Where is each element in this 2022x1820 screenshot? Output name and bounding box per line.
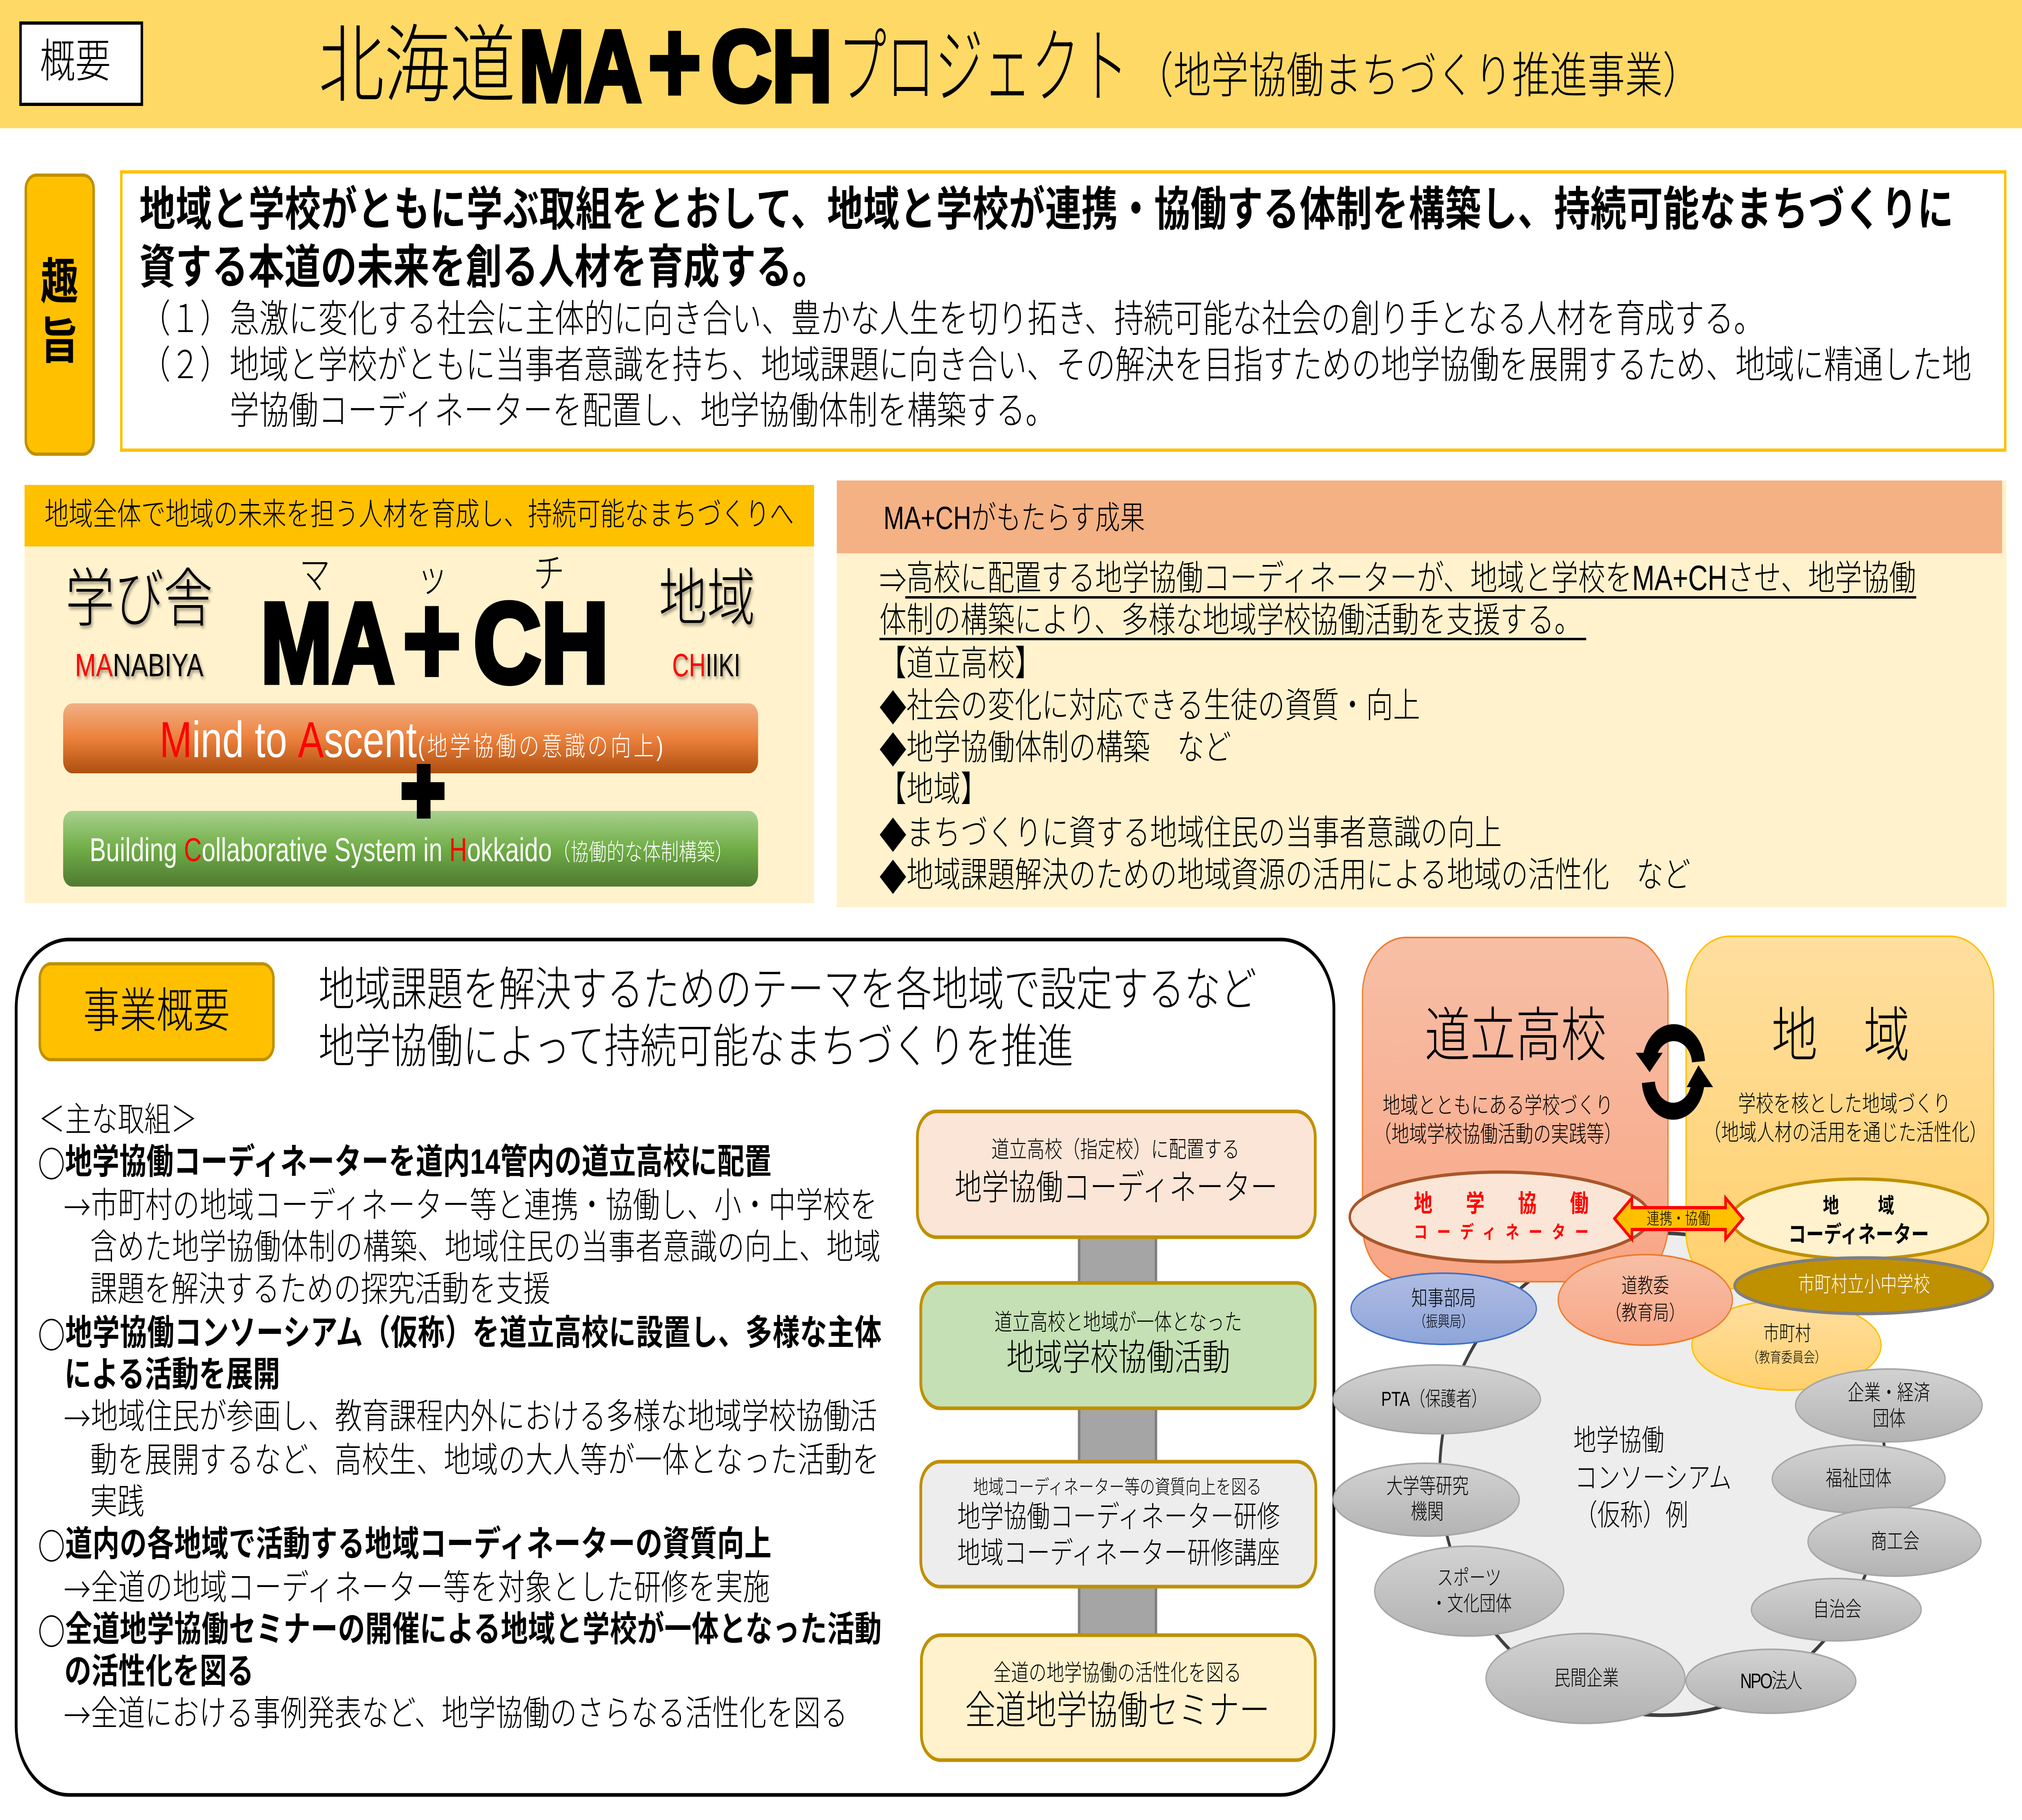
ellipse: NPO: NPO法人 <box>1740 1669 1802 1693</box>
MA+CH logo <box>261 565 609 715</box>
outcomes: high schools <box>880 644 1420 773</box>
ellipse: private companies <box>1486 1634 1685 1723</box>
MA+CH logo: CH <box>474 580 609 707</box>
purpose item 2: （２）地域と学校がともに当事者意識を持ち、地域課題に向き合い、その解決を目指すための地学協働を展開するため、地域に精通した地 <box>141 343 1971 386</box>
manabiya word: 学び舎 <box>66 563 213 635</box>
outcomes: region: 【地域】 <box>880 770 988 809</box>
outcomes summary <box>880 553 1916 640</box>
stage: coordinators: 地学協働コーディネーター <box>955 1168 1277 1207</box>
ellipse: welfare groups: 福祉団体 <box>1826 1467 1892 1491</box>
stage: training <box>921 1462 1316 1587</box>
stage: coordinators <box>917 1111 1315 1237</box>
ellipse: governor's bureau <box>1351 1273 1536 1344</box>
initiative 1: →市町村の地域コーディネーター等と連携・協働し、小・中学校を <box>64 1180 877 1231</box>
icon: cycle arrows <box>1636 1033 1713 1111</box>
initiative 4: の活性化を図る <box>64 1652 254 1691</box>
ellipse: universities: 機関 <box>1411 1500 1444 1524</box>
diagram: consortium <box>1333 936 1994 1723</box>
panel: outcomes <box>837 480 2007 907</box>
orange bar: Mind to Ascent <box>63 703 758 773</box>
initiative 2 <box>38 1308 882 1522</box>
green bar: Building Collaborative System: Building Collaborative System in Hokkaido <box>90 831 552 868</box>
initiative 1: 含めた地学協働体制の構築、地域住民の当事者意識の向上、地域 <box>90 1228 881 1267</box>
double arrow: collaboration: 連携・協働 <box>1647 1209 1711 1228</box>
ellipse: neighbourhood association: 自治会 <box>1813 1598 1861 1621</box>
ellipse: geography coordinator: 地学協働 <box>1414 1191 1588 1217</box>
title: （地学協働まちづくり推進事業） <box>1136 48 1701 103</box>
chiiki word: 地域 <box>659 564 755 633</box>
panel: region: 学校を核とした地域づくり <box>1738 1091 1951 1117</box>
orange bar: Mind to Ascent: (地学協働の意識の向上) <box>418 732 663 761</box>
ellipse: municipality: 市町村 <box>1763 1322 1811 1345</box>
double arrow: collaboration <box>1614 1198 1743 1239</box>
stage: joint activity: 地域学校協働活動 <box>1007 1337 1230 1378</box>
ellipse: regional coordinator: 地域 <box>1823 1194 1894 1217</box>
manabiya word: MANABIYA <box>75 647 203 684</box>
panel: MA+CH concept <box>25 485 814 903</box>
ellipse: governor's bureau: 知事部局 <box>1411 1287 1476 1310</box>
ellipse: welfare groups <box>1772 1445 1945 1513</box>
ellipse: universities: 大学等研究 <box>1386 1474 1469 1498</box>
ellipse: commerce association <box>1808 1507 1981 1576</box>
initiative 1 <box>38 1136 881 1309</box>
initiative 3: →全道の地域コーディネーター等を対象とした研修を実施 <box>64 1562 770 1613</box>
initiative 2: 動を展開するなど、高校生、地域の大人等が一体となった活動を <box>90 1441 880 1480</box>
purpose tag: 趣 <box>40 255 78 310</box>
title: MA <box>519 10 641 123</box>
stage: seminar: 全道地学協働セミナー <box>965 1688 1270 1733</box>
ellipse: universities <box>1333 1463 1519 1536</box>
outcomes: high schools: ◆社会の変化に対応できる生徒の資質・向上 <box>880 680 1420 731</box>
title: CH <box>711 10 832 123</box>
orange bar: Mind to Ascent: Mind to Ascent <box>160 711 417 768</box>
ellipse: PTA <box>1333 1365 1540 1434</box>
initiative 4: ○全道地学協働セミナーの開催による地域と学校が一体となった活動 <box>38 1604 882 1655</box>
katakana reading: ッ <box>417 555 448 600</box>
outcomes: high schools: ◆地学協働体制の構築 など <box>880 722 1231 773</box>
main initiatives list: ＜主な取組＞ <box>38 1100 197 1139</box>
consortium label <box>1574 1424 1732 1532</box>
ellipse: business groups: 団体 <box>1873 1407 1906 1431</box>
MA+CH logo: + <box>402 565 462 715</box>
plus sign <box>402 764 444 819</box>
outcomes summary: 体制の構築により、多様な地域学校協働活動を支援する。 <box>880 601 1582 640</box>
ellipse: geography coordinator: コーディネーター <box>1414 1222 1588 1242</box>
initiative 3 <box>38 1519 772 1613</box>
ellipse: business groups <box>1796 1369 1982 1442</box>
ellipse: NPO <box>1686 1649 1856 1713</box>
stage: training: 地域コーディネーター等の資質向上を図る <box>973 1476 1262 1498</box>
ellipse: board of education: 道教委 <box>1622 1274 1669 1297</box>
stage: joint activity <box>921 1283 1315 1408</box>
main initiatives list <box>38 1100 882 1739</box>
katakana reading: チ <box>533 551 565 596</box>
panel: region <box>1686 936 1994 1289</box>
project tag <box>40 964 273 1060</box>
outcomes heading band: MA+CHがもたらす成果 <box>884 500 1145 536</box>
initiative 2: →地域住民が参画し、教育課程内外における多様な地域学校協働活 <box>64 1391 877 1442</box>
MA+CH logo: MA <box>261 580 394 707</box>
initiative 4 <box>38 1604 882 1739</box>
ellipse: municipal schools: 市町村立小中学校 <box>1798 1272 1930 1297</box>
purpose item 2 continued: 学協働コーディネーターを配置し、地学協働体制を構築する。 <box>230 389 1055 432</box>
initiative 1: 課題を解決するための探究活動を支援 <box>90 1270 550 1309</box>
ellipse: regional coordinator <box>1731 1179 1988 1259</box>
outcomes: high schools: 【道立高校】 <box>880 644 1042 683</box>
project tag: 事業概要 <box>83 984 230 1038</box>
label: overview: 概要 <box>40 36 111 87</box>
green bar: Building Collaborative System <box>63 811 758 887</box>
ellipse: sports and culture: スポーツ <box>1437 1566 1502 1589</box>
stage: joint activity: 道立高校と地域が一体となった <box>994 1309 1242 1335</box>
ellipse: commerce association: 商工会 <box>1871 1530 1919 1553</box>
consortium label: （仮称）例 <box>1575 1498 1688 1532</box>
initiative 1: ○地学協働コーディネーターを道内14管内の道立高校に配置 <box>38 1136 772 1187</box>
purpose tag <box>26 175 94 454</box>
outcomes: region: ◆地域課題解決のための地域資源の活用による地域の活性化 など <box>880 850 1690 901</box>
outcomes: region <box>880 770 1690 901</box>
concept banner <box>25 485 814 546</box>
initiative 3: ○道内の各地域で活動する地域コーディネーターの資質向上 <box>38 1519 772 1570</box>
stage: training: 地学協働コーディネーター研修 <box>957 1500 1280 1534</box>
green bar: Building Collaborative System: （協働的な体制構築） <box>552 839 733 866</box>
panel: high school <box>1362 938 1668 1282</box>
panel: high school: 地域とともにある学校づくり <box>1383 1092 1613 1118</box>
panel: region: 地 域 <box>1772 1002 1910 1069</box>
ellipse: business groups: 企業・経済 <box>1848 1381 1930 1405</box>
connector column <box>1079 1234 1156 1638</box>
title: 北海道 <box>319 18 516 113</box>
panel: high school: （地域学校協働活動の実践等） <box>1374 1121 1622 1147</box>
project heading <box>319 963 1256 1073</box>
outcomes summary: ⇒高校に配置する地学協働コーディネーターが、地域と学校をMA+CHさせ、地学協働 <box>880 553 1916 604</box>
stage: seminar: 全道の地学協働の活性化を図る <box>993 1660 1242 1686</box>
ellipse: municipal schools <box>1734 1258 1993 1314</box>
ellipse: governor's bureau: （振興局） <box>1414 1313 1473 1330</box>
stage: training: 地域コーディネーター研修講座 <box>957 1537 1280 1570</box>
chiiki word <box>659 564 755 684</box>
title: プロジェクト <box>838 21 1128 114</box>
stage: seminar <box>921 1635 1315 1760</box>
label: overview <box>21 23 142 104</box>
ellipse: board of education: （教育局） <box>1605 1301 1685 1325</box>
katakana reading: マ <box>299 552 330 598</box>
panel: project overview <box>16 940 1334 1795</box>
consortium circle <box>1440 1233 1886 1715</box>
chiiki word: CHIIKI <box>672 647 740 684</box>
project heading: 地域課題を解決するためのテーマを各地域で設定するなど <box>319 963 1256 1016</box>
purpose item 1: （１）急激に変化する社会に主体的に向き合い、豊かな人生を切り拓き、持続可能な社会の創り手となる人材を育成する。 <box>141 297 1763 340</box>
ellipse: regional coordinator: コーディネーター <box>1788 1221 1929 1247</box>
initiative 4: →全道における事例発表など、地学協働のさらなる活性化を図る <box>64 1688 848 1739</box>
ellipse: neighbourhood association <box>1751 1579 1921 1641</box>
concept banner: 地域全体で地域の未来を担う人材を育成し、持続可能なまちづくりへ <box>44 496 794 532</box>
ellipse: PTA: PTA（保護者） <box>1381 1388 1487 1410</box>
ellipse: sports and culture: ・文化団体 <box>1431 1592 1512 1615</box>
project heading: 地学協働によって持続可能なまちづくりを推進 <box>319 1020 1073 1073</box>
initiative 2: による活動を展開 <box>64 1355 280 1394</box>
initiative 2: ○地学協働コンソーシアム（仮称）を道立高校に設置し、多様な主体 <box>38 1308 882 1359</box>
ellipse: private companies: 民間企業 <box>1554 1666 1619 1690</box>
manabiya word <box>66 563 213 684</box>
katakana reading <box>299 551 565 600</box>
ellipse: municipality <box>1692 1300 1881 1390</box>
ellipse: board of education <box>1558 1255 1732 1345</box>
purpose tag: 旨 <box>40 314 78 369</box>
purpose text panel <box>121 172 2005 450</box>
ellipse: sports and culture <box>1375 1546 1564 1636</box>
panel: region: （地域人材の活用を通じた活性化） <box>1703 1120 1987 1145</box>
ellipse: municipality: （教育委員会） <box>1748 1349 1826 1365</box>
stage: coordinators: 道立高校（指定校）に配置する <box>992 1136 1239 1162</box>
title <box>319 0 1701 129</box>
outcomes: region: ◆まちづくりに資する地域住民の当事者意識の向上 <box>880 808 1502 859</box>
consortium label: 地学協働 <box>1574 1424 1664 1457</box>
outcomes heading band <box>837 480 2002 553</box>
header band <box>0 0 2022 129</box>
consortium label: コンソーシアム <box>1575 1461 1732 1494</box>
ellipse: geography coordinator <box>1350 1172 1650 1262</box>
purpose lead line 2: 資する本道の未来を創る人材を育成する。 <box>140 241 828 293</box>
purpose lead: 地域と学校がともに学ぶ取組をとおして、地域と学校が連携・協働する体制を構築し、持続可能なまちづくりに <box>140 183 1954 235</box>
initiative 2: 実践 <box>90 1483 144 1522</box>
panel: high school: 道立高校 <box>1425 1002 1606 1069</box>
